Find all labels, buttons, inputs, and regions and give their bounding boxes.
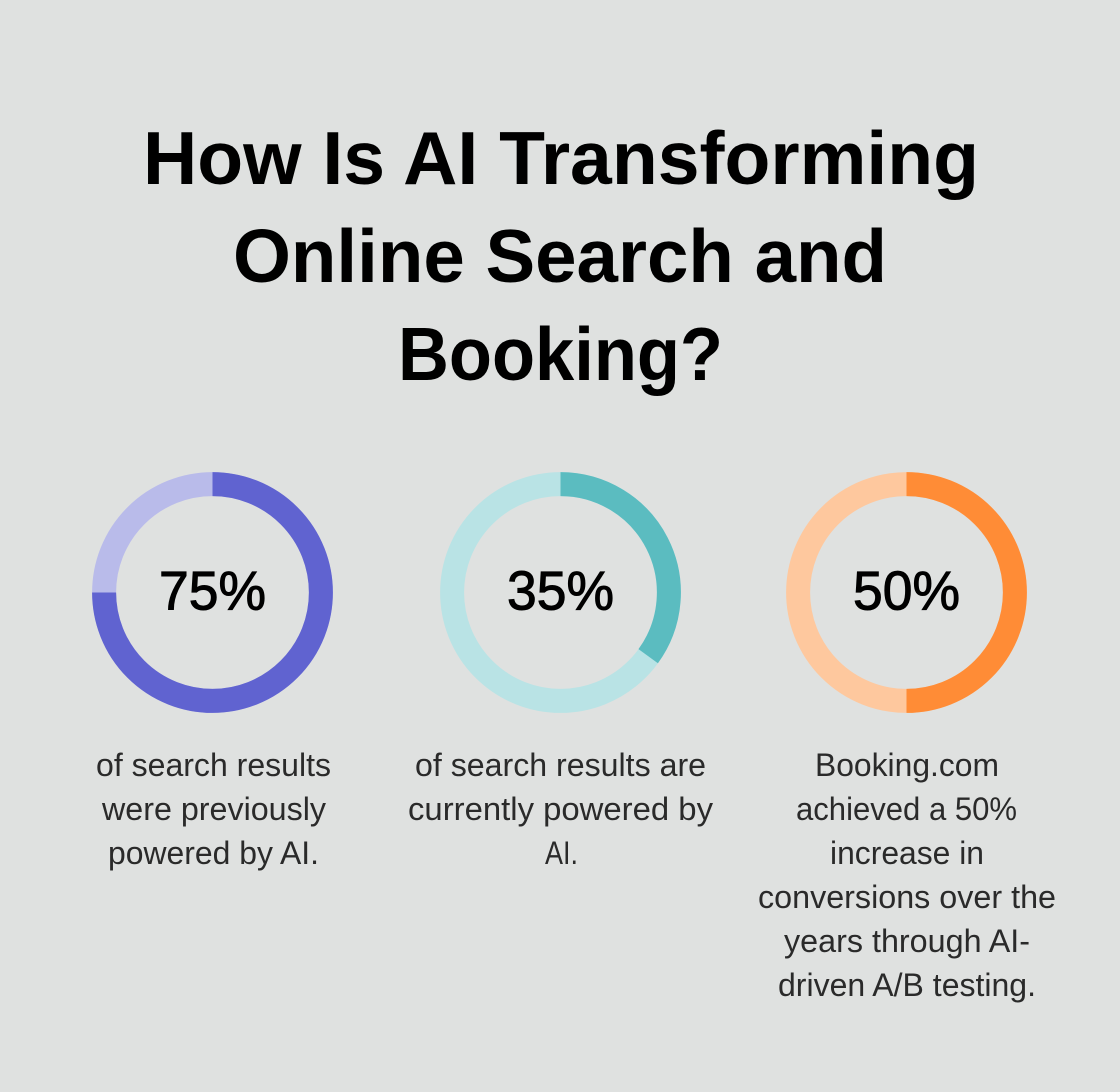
panel: 75% stat (96, 484, 331, 871)
title (143, 116, 979, 396)
value: 75%: 75% (159, 560, 266, 622)
description: 35%: AI. (545, 835, 578, 871)
description: 50%: achieved a 50% (796, 791, 1017, 827)
title: Booking? (398, 312, 723, 396)
title: Online Search and (233, 214, 887, 298)
description: 75%: of search results (96, 747, 331, 783)
description: 75% (96, 747, 331, 871)
description: 50%: increase in (830, 835, 984, 871)
value: 35%: 35% (507, 560, 614, 622)
value: 50%: 50% (853, 560, 960, 622)
description: 50% (758, 747, 1056, 1003)
panel: 35% stat (408, 484, 713, 871)
donut chart: 75% (104, 484, 321, 701)
description: 50%: years through AI- (784, 923, 1030, 959)
panel: 50% stat (758, 484, 1056, 1003)
donut chart: 35% (452, 484, 669, 701)
description: 50%: Booking.com (815, 747, 999, 783)
description: 35%: of search results are (415, 747, 706, 783)
donut chart: 50% (798, 484, 1015, 701)
title: How Is AI Transforming (143, 116, 979, 200)
description: 75%: were previously (101, 791, 326, 827)
description: 50%: conversions over the (758, 879, 1056, 915)
description: 75%: powered by AI. (108, 835, 319, 871)
description: 50%: driven A/B testing. (778, 967, 1036, 1003)
description: 35% (408, 747, 713, 871)
description: 35%: currently powered by (408, 791, 713, 827)
